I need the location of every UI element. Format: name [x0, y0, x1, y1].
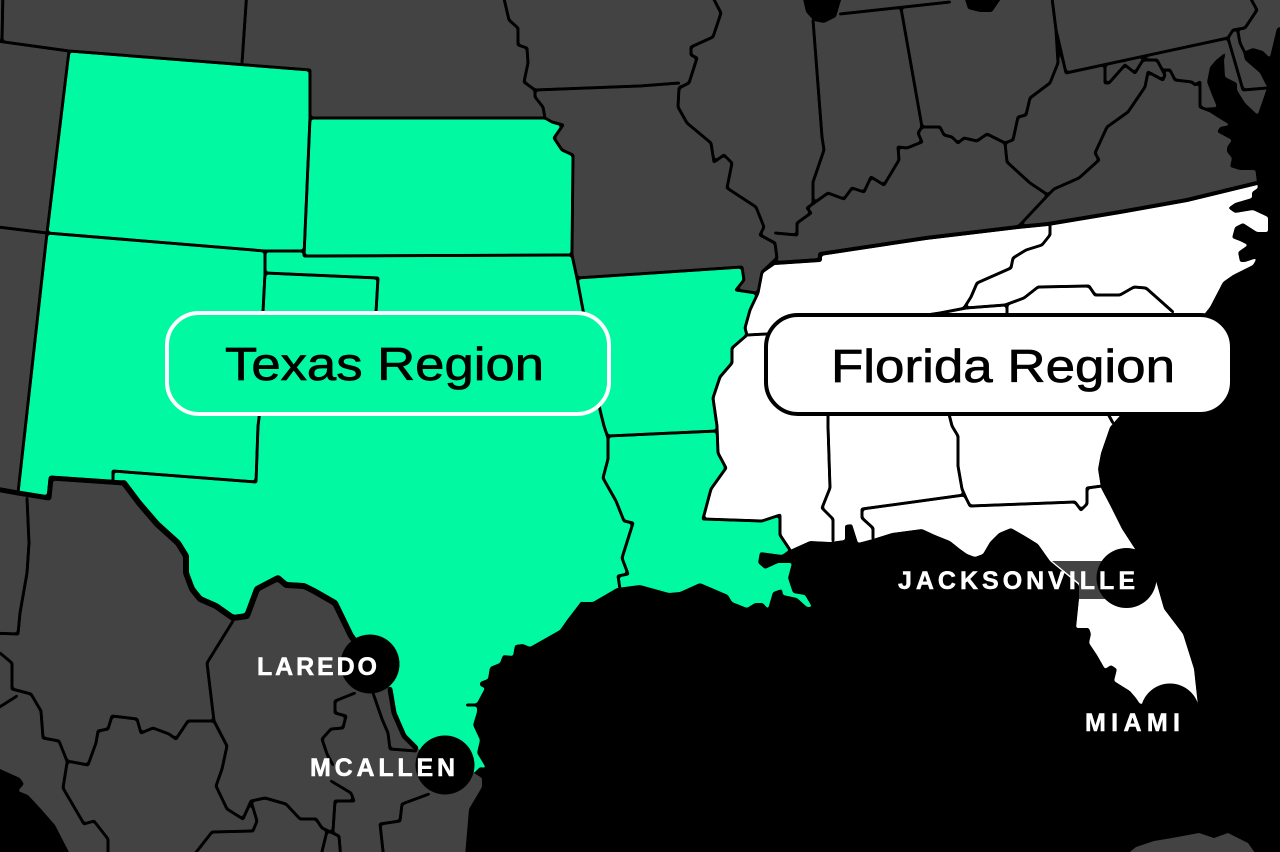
- florida region fill: [703, 183, 1268, 706]
- marker: laredo: [340, 634, 400, 694]
- label: laredo: LAREDO: [257, 653, 377, 681]
- marker: jacksonville: [1096, 548, 1156, 608]
- callout: florida region: [766, 315, 1232, 414]
- label: mcallen: MCALLEN: [310, 754, 455, 782]
- region: florida states: [703, 183, 1268, 706]
- callout: texas region: [167, 313, 609, 414]
- texas region state borders: [18, 51, 790, 705]
- label: miami: MIAMI: [1085, 709, 1180, 737]
- florida region state borders: [747, 225, 1173, 541]
- city label shadow band: jacksonville: [1052, 561, 1110, 599]
- callout: texas region: Texas Region: [225, 338, 544, 390]
- label: jacksonville: JACKSONVILLE: [898, 567, 1135, 595]
- texas region fill: [18, 51, 812, 773]
- region: texas states: [0, 51, 812, 773]
- marker: mcallen: [416, 736, 474, 794]
- cuba: [1120, 833, 1260, 852]
- callout: florida region: Florida Region: [831, 340, 1175, 392]
- marker: miami: [1140, 684, 1200, 742]
- rio grande border: [0, 478, 416, 748]
